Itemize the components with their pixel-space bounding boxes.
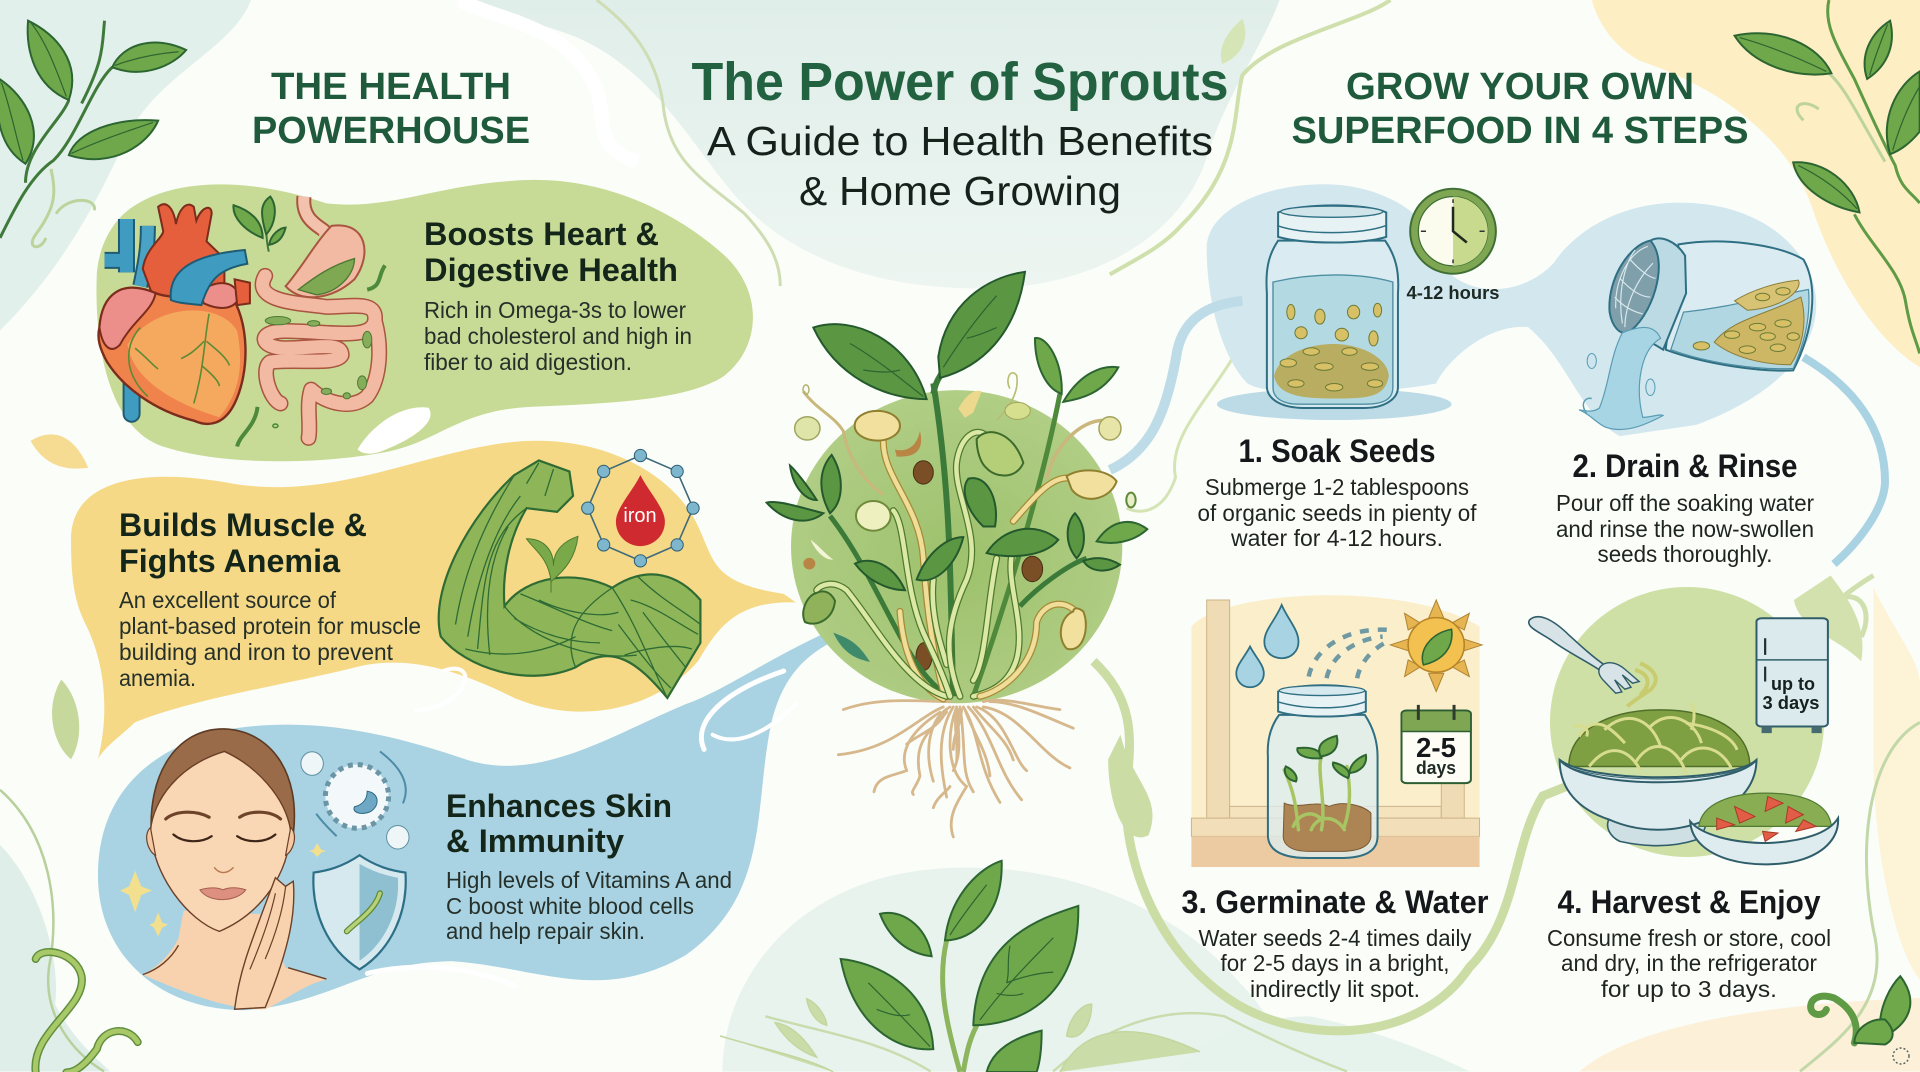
panel text: heart and digestive health: fiber to aid digestion. — [424, 349, 632, 375]
heading: grow your own — [1292, 66, 1748, 152]
white swirls over the blue panel — [367, 671, 796, 986]
panel text: heart and digestive health: bad cholesterol and high in — [424, 323, 692, 349]
step 3 text: 3. Germinate & Water — [1182, 884, 1488, 920]
pale accent leaves — [31, 434, 88, 759]
panel text: skin and immunity — [446, 788, 732, 944]
step 1 text — [1198, 433, 1477, 551]
icon: water drops and spray — [1236, 605, 1390, 687]
step 1 text: Submerge 1-2 tablespoons — [1205, 474, 1469, 500]
step 2 text: seeds thoroughly. — [1598, 541, 1772, 567]
bottom center plant — [720, 861, 1200, 1072]
watermark icon — [1893, 1048, 1909, 1064]
thin sprouts and pale seeds — [795, 373, 1121, 495]
icon: sparkles — [120, 843, 326, 937]
panel text: muscle and anemia: An excellent source of — [119, 587, 337, 613]
heading: the health powerhouse — [252, 66, 530, 152]
step 4 text: 4. Harvest & Enjoy — [1558, 884, 1821, 920]
icon: clock — [1410, 189, 1496, 274]
panel background: blue blob — [98, 624, 857, 1010]
icon: calendar 2-5 days: 2-5 — [1416, 732, 1456, 763]
icon: heart — [98, 204, 250, 424]
icon: bowl of sprouts — [1560, 703, 1756, 846]
step 2: drain and rinse — [1556, 238, 1814, 567]
icon: jar with sprouts — [1268, 685, 1378, 858]
step 4 text: for up to 3 days. — [1601, 976, 1777, 1002]
icon: digestive system — [263, 197, 379, 438]
panel: heart and digestive health — [96, 180, 753, 461]
icon: refrigerator — [1756, 618, 1828, 733]
title — [692, 52, 1228, 214]
step 1 text: 1. Soak Seeds — [1238, 433, 1436, 469]
panel text: muscle and anemia: Builds Muscle & — [119, 507, 367, 543]
label: 4-12 hours: 4-12 hours — [1406, 283, 1500, 303]
panel text: muscle and anemia: building and iron to prevent — [119, 639, 394, 665]
brown seed hulls — [803, 431, 1043, 670]
step 4: harvest and enjoy — [1529, 587, 1838, 1002]
pale sprout stems with seeds — [803, 411, 1117, 699]
panel text: muscle and anemia: anemia. — [119, 665, 196, 691]
bottom right sprout — [1811, 976, 1910, 1045]
heading: the health powerhouse: POWERHOUSE — [252, 110, 530, 152]
panel: skin and immunity — [98, 624, 857, 1010]
step 3: germinate and water — [1182, 595, 1488, 1002]
icon: refrigerator: up to — [1771, 674, 1815, 694]
panel text: muscle and anemia — [119, 507, 421, 691]
vine: top right leaves — [1735, 0, 1920, 353]
icon: calendar 2-5 days — [1402, 705, 1471, 783]
icon: iron molecule ring — [582, 449, 699, 567]
green circle behind step 4 — [1550, 587, 1824, 857]
step 1 text: water for 4-12 hours. — [1230, 525, 1443, 551]
bottom left curly shoots — [35, 952, 138, 1072]
title: A Guide to Health Benefits — [707, 118, 1213, 164]
step 4 text — [1547, 884, 1831, 1002]
step 4 text: Consume fresh or store, cool — [1547, 925, 1831, 951]
panel text: skin and immunity: and help repair skin. — [446, 918, 645, 944]
panel text: heart and digestive health: Digestive Health — [424, 252, 678, 288]
panel text: heart and digestive health — [424, 216, 692, 375]
heading: grow your own: SUPERFOOD IN 4 STEPS — [1292, 110, 1748, 152]
icon: woman's face — [143, 729, 326, 1009]
title: The Power of Sprouts — [692, 52, 1228, 112]
panel text: heart and digestive health: Boosts Heart & — [424, 216, 659, 252]
step 3 text — [1182, 884, 1488, 1002]
step 2 text: Pour off the soaking water — [1556, 490, 1814, 516]
title: & Home Growing — [799, 168, 1121, 214]
icon: white blood cell — [301, 751, 409, 849]
pale blue blob behind steps 1 and 2 — [1110, 184, 1885, 564]
step 4 text: and dry, in the refrigerator — [1561, 950, 1817, 976]
icon: calendar 2-5 days: days — [1416, 758, 1456, 778]
step 1: soak seeds — [1110, 184, 1885, 564]
central sprout illustration — [767, 272, 1147, 837]
step 3 text: Water seeds 2-4 times daily — [1198, 925, 1472, 951]
panel text: heart and digestive health: Rich in Omega-3s to lower — [424, 297, 686, 323]
step 2 text: and rinse the now-swollen — [1556, 516, 1814, 542]
heading: grow your own: GROW YOUR OWN — [1346, 66, 1694, 108]
panel text: skin and immunity: Enhances Skin — [446, 788, 672, 824]
step 2 text: 2. Drain & Rinse — [1572, 448, 1798, 484]
vine: top left leaves — [0, 21, 186, 247]
step 3 text: for 2-5 days in a bright, — [1220, 950, 1450, 976]
heading: the health powerhouse: THE HEALTH — [271, 66, 511, 108]
green circle behind sprout — [791, 390, 1122, 703]
step 1 text: of organic seeds in pienty of — [1198, 500, 1477, 526]
step 3 text: indirectly lit spot. — [1250, 976, 1420, 1002]
icon: flexed muscle arm — [439, 460, 700, 698]
icon: shield with sprout — [313, 855, 406, 969]
icon: fork with sprouts — [1529, 617, 1656, 707]
label: iron: iron — [623, 505, 657, 527]
icon: sun with leaf — [1390, 600, 1482, 692]
window scene — [1191, 595, 1480, 867]
panel text: muscle and anemia: Fights Anemia — [119, 543, 340, 579]
roots — [838, 700, 1073, 837]
main stems and top leaves — [767, 272, 1147, 696]
panel: muscle and anemia — [71, 441, 796, 759]
icon: refrigerator: 3 days — [1762, 693, 1820, 713]
icon: jar with soaking seeds — [1266, 205, 1398, 408]
white swirls between green and yellow panels — [358, 407, 465, 710]
panel text: skin and immunity: C boost white blood cells — [446, 893, 694, 919]
icon: small herb and sprouts — [233, 197, 385, 447]
panel text: skin and immunity: High levels of Vitamins A and — [446, 867, 732, 893]
panel background: yellow blob — [71, 441, 796, 759]
panel text: skin and immunity: & Immunity — [446, 823, 624, 859]
step 2 text — [1556, 448, 1814, 567]
panel text: muscle and anemia: plant-based protein for muscle — [119, 613, 421, 639]
panel background: green blob — [96, 180, 753, 461]
icon: salad bowl — [1690, 793, 1838, 864]
icon: tilted jar pouring water — [1579, 238, 1812, 429]
